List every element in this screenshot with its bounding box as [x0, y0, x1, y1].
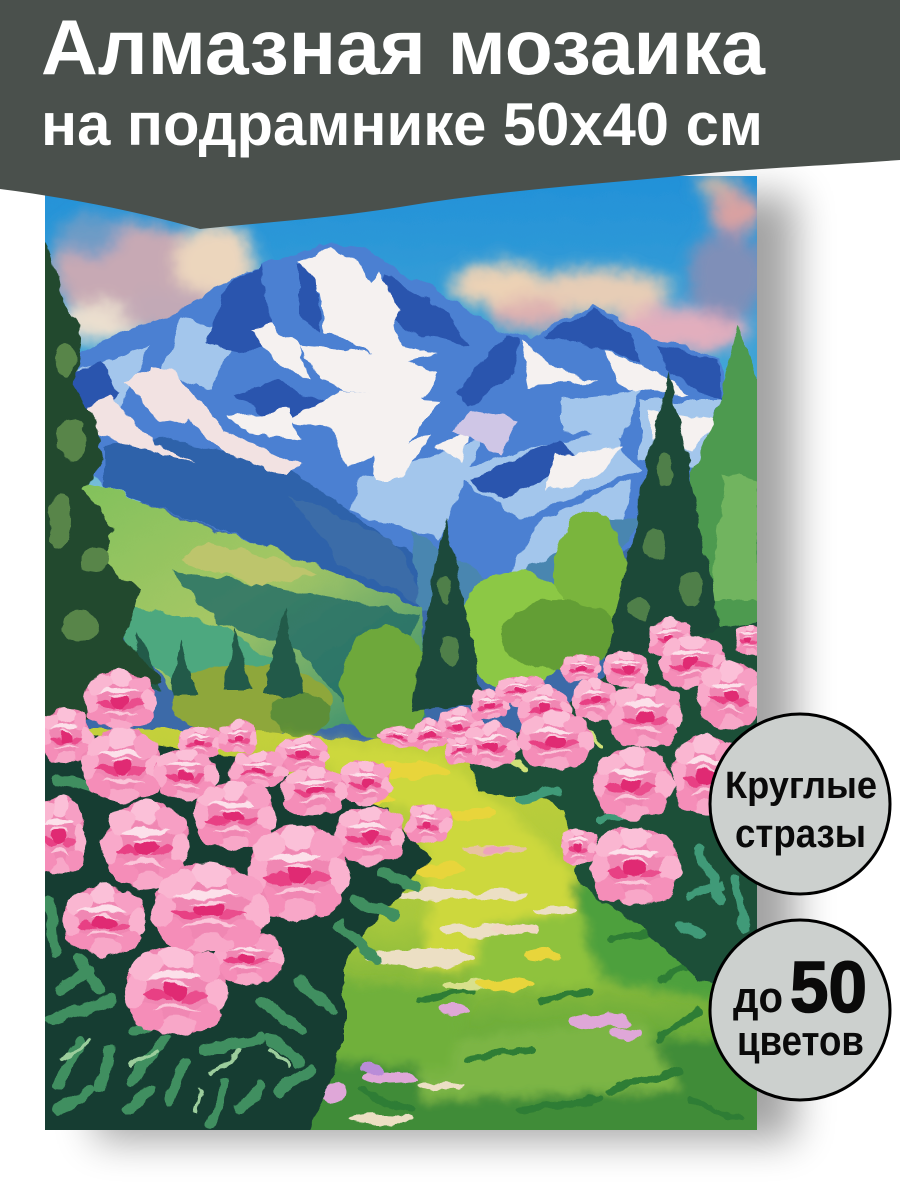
right flower bush foliage: [470, 620, 770, 1000]
canvas shadow: [95, 195, 795, 1140]
badge: round rhinestones: Круглые: [725, 765, 877, 807]
meadow lilac flowers: [323, 846, 639, 1102]
badge: round rhinestones: стразы: [735, 812, 866, 856]
sky: [30, 160, 770, 500]
grass strokes: [360, 930, 740, 1120]
badge: up to 50 colours: 50: [790, 948, 867, 1028]
badge: up to 50 colours: до: [733, 973, 783, 1022]
peonies: left group: [34, 670, 451, 1036]
left leaf strokes: [50, 780, 415, 1125]
blue valley right: [411, 518, 638, 611]
lower blue foothill: [104, 440, 425, 610]
snow fields: [225, 247, 720, 490]
clouds: [50, 175, 768, 354]
title line 1: Алмазная мозаика: [41, 3, 766, 91]
canvas painting: mountain meadow with peonies: [30, 160, 775, 1150]
small conifers: [122, 608, 305, 695]
green valley slope: [82, 484, 426, 730]
left tall tree: [45, 242, 162, 720]
mountain range: [77, 242, 724, 580]
badge: up to 50 colours: [710, 920, 890, 1100]
path highlights: [346, 845, 577, 1125]
yellow daubs: [362, 762, 558, 991]
left flower bush foliage: [45, 735, 432, 1130]
bright green trees: [170, 510, 628, 743]
centre conifer: [412, 520, 482, 710]
header banner: [0, 0, 900, 229]
left snow ridge with pink tint: [80, 367, 520, 475]
right tall trees: [690, 325, 757, 627]
dark mountain strokes: [60, 262, 720, 500]
peonies: right group: [376, 618, 764, 907]
badge: up to 50 colours: цветов: [737, 1017, 864, 1064]
title line 2: на подрамнике 50х40 см: [41, 91, 763, 158]
badge: round rhinestones: [710, 714, 890, 894]
mountain light blue strokes: [70, 320, 720, 590]
right leaf strokes: [520, 790, 745, 935]
meadow ground: [89, 727, 715, 1048]
title: [41, 3, 766, 158]
